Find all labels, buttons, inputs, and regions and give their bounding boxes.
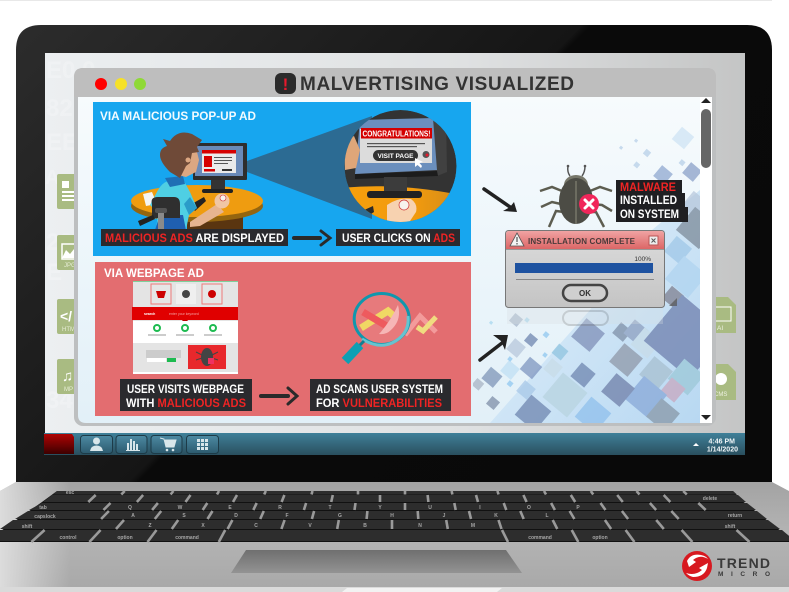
keyboard key rows [0, 491, 789, 542]
keyboard key labels: esc [66, 490, 74, 496]
keyboard key labels: command [528, 535, 552, 541]
dialog: installation complete: INSTALLATION COMPLETE [528, 237, 636, 246]
icon: x badge [579, 194, 599, 214]
label: ad scans user system: FOR VULNERABILITIES [316, 396, 442, 410]
system tray clock [693, 438, 738, 454]
keyboard key labels: H [390, 513, 394, 519]
keyboard key labels: N [418, 523, 422, 529]
label: malware installed on system: ON SYSTEM [620, 209, 679, 221]
arrow [261, 388, 297, 404]
label: malware installed on system: INSTALLED [620, 195, 677, 207]
button: user [80, 436, 112, 454]
keyboard key labels: A [131, 513, 135, 519]
title icon: ! [283, 75, 288, 94]
keyboard key labels: Q [128, 505, 132, 511]
ok button [563, 285, 607, 301]
keyboard key labels: Z [148, 523, 152, 529]
trackpad [231, 550, 522, 573]
keyboard key labels: F [285, 513, 289, 519]
resize handle [669, 298, 677, 306]
dialog: installation complete [506, 230, 664, 308]
scrollbar [700, 97, 712, 423]
keyboard key labels: control [60, 535, 77, 541]
start button [44, 434, 74, 454]
label: ad scans user system: AD SCANS USER SYSTEM [316, 382, 443, 396]
keyboard key gaps [31, 491, 749, 542]
button: chart [116, 436, 147, 454]
icon: HTML [57, 299, 77, 334]
panel heading: VIA MALICIOUS POP-UP AD [100, 109, 256, 123]
keyboard key labels: U [428, 505, 432, 511]
laptop screen bezel [16, 25, 772, 482]
keyboard key labels: W [178, 505, 183, 511]
title: MALVERTISING VISUALIZED [300, 74, 574, 95]
ad banner: CONGRATULATIONS! [362, 130, 430, 138]
keyboard key labels: shift [22, 524, 33, 530]
desktop icons: left [57, 174, 77, 394]
label: ad scans user system [310, 379, 451, 411]
arrow: to malware [484, 189, 517, 212]
keyboard [0, 490, 789, 542]
icon: JPG [57, 235, 77, 270]
label: malicious ads are displayed: MALICIOUS ADS ARE DISPLAYED [105, 231, 284, 245]
keyboard key labels [22, 490, 742, 541]
keyboard key labels: L [545, 513, 549, 519]
icon: magnifying glass [345, 294, 436, 361]
logo: Trend Micro [682, 551, 770, 581]
keyboard key labels: shift [725, 524, 736, 530]
desktop wallpaper: EE [46, 129, 78, 156]
visit page button: VISIT PAGE [378, 153, 414, 160]
label: malware installed on system: MALWARE [620, 182, 676, 194]
keyboard key labels: E [228, 505, 232, 511]
keyboard key labels: option [117, 535, 133, 541]
system tray clock: 4:46 PM [709, 438, 735, 446]
webpage thumbnail: enter your keyword [169, 312, 199, 316]
button: cart [151, 436, 182, 454]
dialog: installation complete: 100% [634, 256, 651, 263]
zoom cone [247, 116, 372, 219]
window controls [95, 78, 146, 90]
label: user visits webpage: WITH MALICIOUS ADS [126, 396, 246, 410]
keyboard key labels: B [363, 523, 367, 529]
keyboard key labels: O [527, 505, 531, 511]
keyboard key labels: return [728, 513, 742, 519]
keyboard key labels: D [234, 513, 238, 519]
arrow: from scan to malware [480, 335, 508, 360]
icon: HTML: HTM [62, 327, 75, 333]
illustration: user at computer [131, 133, 263, 230]
label: malware installed on system [616, 180, 688, 222]
icon: MP3: ♫ [62, 368, 73, 385]
desktop wallpaper: E [46, 259, 62, 286]
desktop wallpaper [45, 53, 745, 433]
desktop wallpaper: 22 [46, 229, 73, 256]
desktop wallpaper: A [45, 167, 59, 189]
arrow [294, 231, 330, 245]
keyboard key labels: option [592, 535, 608, 541]
icon: document [57, 174, 77, 209]
icon: CMS: CMS [714, 392, 727, 398]
keyboard key labels: X [201, 523, 205, 529]
progress bar [515, 263, 653, 273]
desktop wallpaper: E0 0 [46, 57, 95, 84]
background diamonds [473, 127, 700, 423]
panel heading: VIA WEBPAGE AD [104, 266, 204, 280]
keyboard key labels: P [576, 505, 580, 511]
button: apps [186, 436, 218, 454]
title bar [74, 68, 716, 97]
keyboard key labels: Y [378, 505, 382, 511]
icon: MP3 [57, 359, 77, 394]
keyboard key labels: M [471, 523, 475, 529]
keyboard key labels: C [254, 523, 258, 529]
icon: warning [510, 233, 524, 246]
close button [649, 236, 658, 245]
icon: malware bug [540, 165, 612, 227]
window frame [74, 68, 716, 426]
keyboard key labels: I [479, 505, 481, 511]
desktop wallpaper: 34 [46, 387, 73, 414]
keyboard key labels: command [175, 535, 199, 541]
panel: webpage ad [95, 262, 471, 416]
keyboard key labels: S [182, 513, 186, 519]
keyboard key labels: R [278, 505, 282, 511]
keyboard key labels: K [494, 513, 498, 519]
label: user clicks on ads: USER CLICKS ON ADS [342, 231, 455, 245]
icon: MP3: MP [64, 387, 73, 393]
panel: malicious pop-up ad [93, 102, 471, 256]
dialog reflection [507, 308, 663, 325]
icon: AI: AI [717, 325, 723, 332]
icon: JPG: JPG [64, 263, 76, 269]
webpage thumbnail [132, 281, 238, 374]
label: user visits webpage [120, 379, 252, 411]
icon: HTML: </ [60, 308, 72, 324]
browser window [74, 68, 728, 433]
logo: Trend Micro: TREND [717, 555, 770, 571]
window content background [78, 97, 712, 423]
laptop base [0, 482, 789, 592]
desktop icons: right [714, 297, 736, 400]
keyboard key labels: tab [39, 505, 47, 511]
keyboard key labels: delete [703, 496, 717, 502]
title icon [275, 73, 296, 94]
keyboard key labels: G [338, 513, 342, 519]
ok button: OK [579, 289, 591, 298]
keyboard key labels: capslock [34, 514, 56, 520]
logo: Trend Micro: MICRO [718, 571, 770, 578]
illustration: magnified ad [344, 110, 456, 222]
desktop wallpaper: 82 [46, 95, 73, 122]
webpage thumbnail: search [144, 312, 155, 316]
keyboard key labels: T [328, 505, 332, 511]
keyboard key labels: V [308, 523, 312, 529]
taskbar [44, 433, 745, 455]
system tray clock: 1/14/2020 [707, 446, 738, 454]
label: user visits webpage: USER VISITS WEBPAGE [127, 382, 244, 396]
keyboard key labels: J [443, 513, 446, 519]
